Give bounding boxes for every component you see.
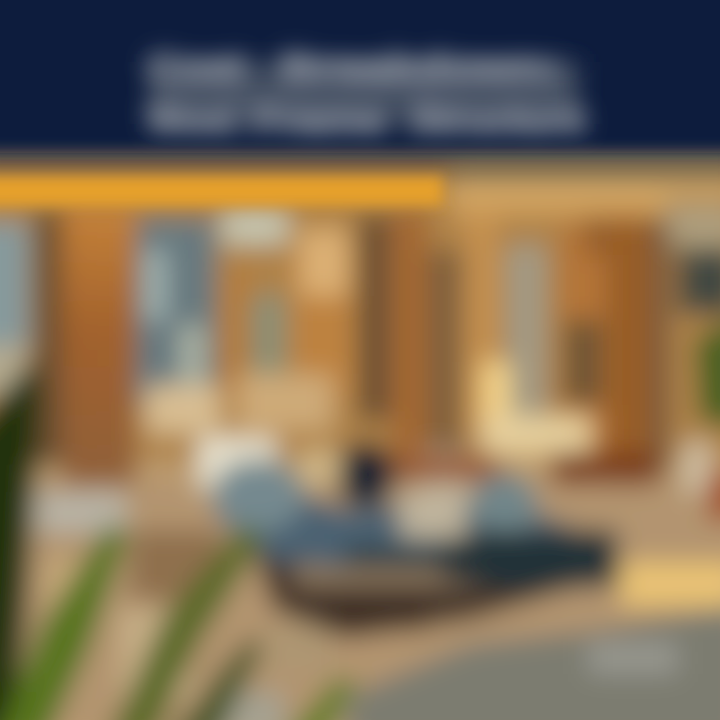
timber posts: vertical wood frame (34, 205, 670, 485)
floor highlights: pale cushions and light patches (36, 362, 720, 700)
title: two-line heading, illegible in the reference: Frame (252, 98, 386, 140)
background: warm room tones (0, 148, 720, 720)
sofa: blue-grey seating with wooden base (212, 443, 622, 638)
title: two-line heading, illegible in the reference: Structure (410, 98, 585, 140)
title: two-line heading, illegible in the reference: Cost (148, 48, 245, 90)
title: two-line heading, illegible in the reference (148, 48, 585, 140)
title: two-line heading, illegible in the reference: Wood (148, 98, 236, 140)
title banner: dark navy (0, 0, 720, 153)
paving: grey ground at lower right (208, 605, 720, 720)
accent bar: orange stripe (0, 176, 443, 206)
title: two-line heading, illegible in the reference: Breakdown: (280, 48, 562, 90)
plants: green foreground leaves (0, 315, 720, 720)
photo: everything below the banner (0, 148, 720, 720)
upper beam: right side light timber (450, 178, 720, 216)
title glow: haze behind the heading (150, 62, 580, 124)
windows: blue-grey openings in the frame (0, 152, 720, 420)
